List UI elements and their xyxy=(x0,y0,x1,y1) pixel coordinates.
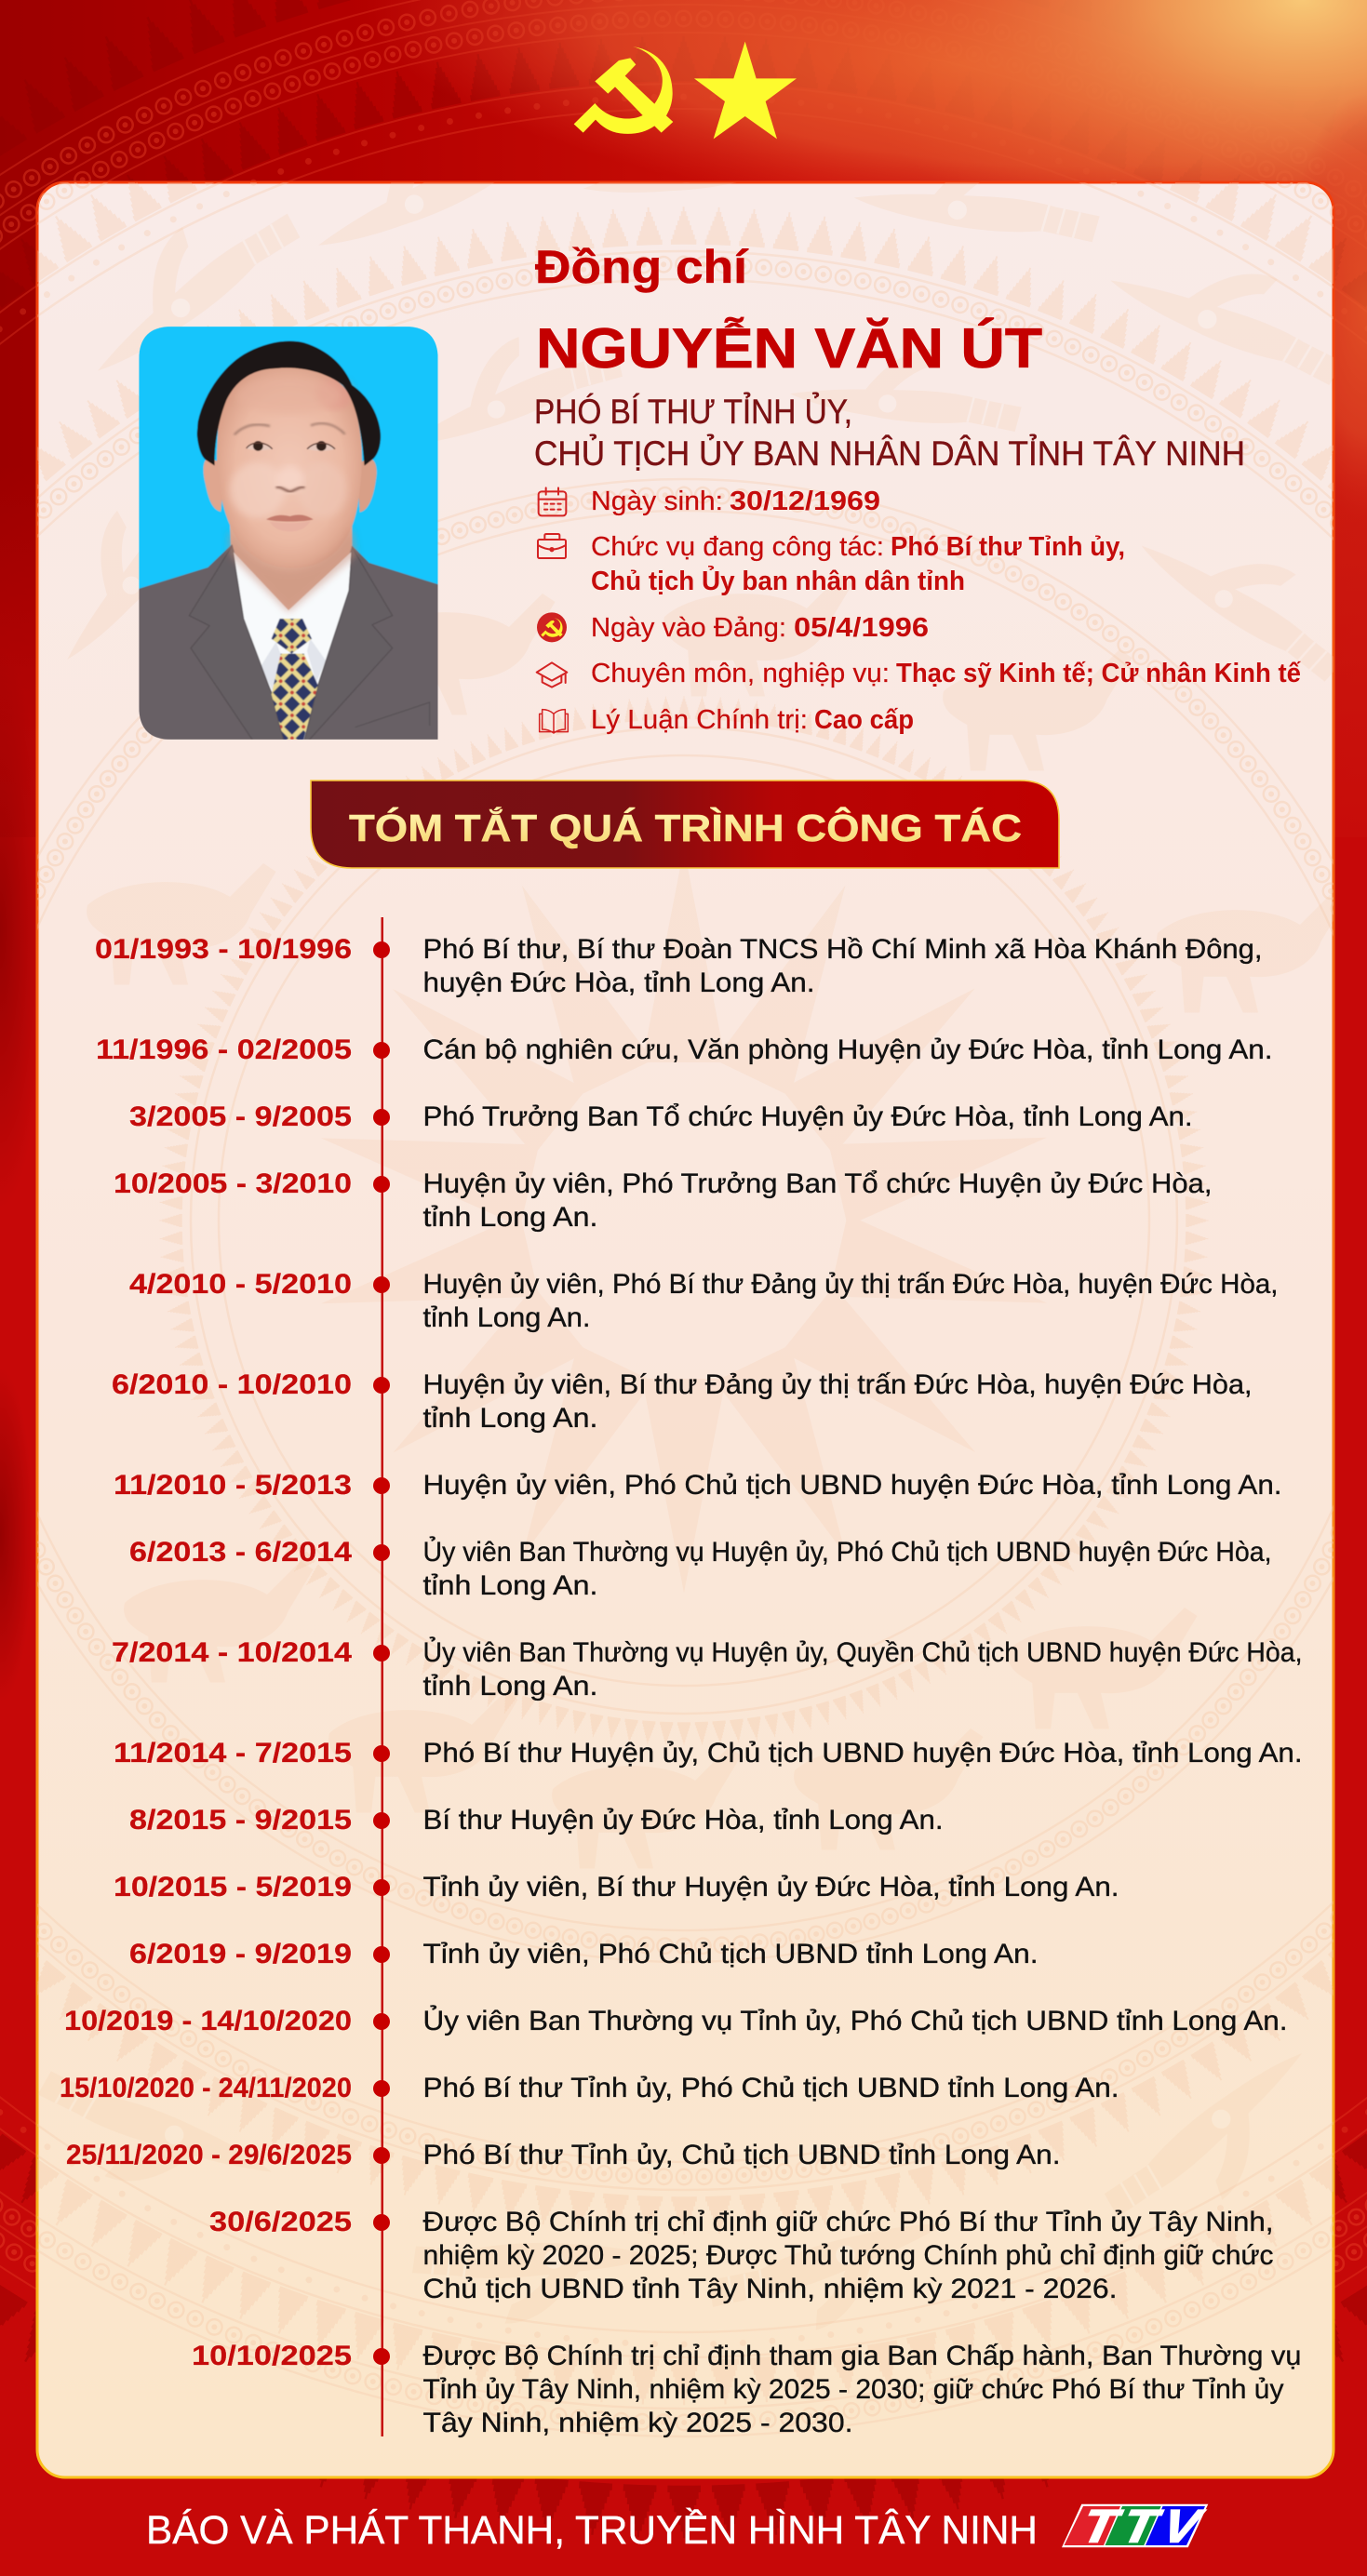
icon: calendar xyxy=(539,487,566,515)
party join date xyxy=(591,613,929,643)
row 9 xyxy=(112,1636,1303,1702)
row 4 xyxy=(114,1168,1212,1233)
row 4: 10/2005 - 3/2010 xyxy=(114,1168,352,1199)
name block xyxy=(534,241,1245,473)
hair xyxy=(197,341,381,466)
row 4: Huyện ủy viên, Phó Trưởng Ban Tổ chức Huyện ủy Đức Hòa, xyxy=(422,1168,1212,1199)
row 6: 6/2010 - 10/2010 xyxy=(112,1369,352,1400)
political theory: Cao cấp xyxy=(814,705,914,735)
row 1 xyxy=(95,934,1262,998)
row 16: Phó Bí thư Tỉnh ủy, Chủ tịch UBND tỉnh Long An. xyxy=(422,2140,1061,2170)
row 13 xyxy=(129,1939,1039,1969)
section banner heading: TÓM TẮT QUÁ TRÌNH CÔNG TÁC xyxy=(349,807,1022,849)
jacket xyxy=(133,544,444,747)
row 13: Tỉnh ủy viên, Phó Chủ tịch UBND tỉnh Long An. xyxy=(422,1939,1039,1969)
row 2 xyxy=(96,1034,1273,1065)
timeline xyxy=(60,917,1303,2438)
expertise: Chuyên môn, nghiệp vụ: xyxy=(591,659,890,688)
row 3 xyxy=(129,1101,1193,1132)
row 7: Huyện ủy viên, Phó Chủ tịch UBND huyện Đức Hòa, tỉnh Long An. xyxy=(422,1470,1282,1501)
TTV logo: T xyxy=(1112,2502,1169,2553)
row 14: Ủy viên Ban Thường vụ Tỉnh ủy, Phó Chủ tịch UBND tỉnh Long An. xyxy=(422,2005,1288,2036)
TTV logo: V xyxy=(1152,2502,1211,2553)
row 11: Bí thư Huyện ủy Đức Hòa, tỉnh Long An. xyxy=(422,1805,944,1835)
row 9: Ủy viên Ban Thường vụ Huyện ủy, Quyền Chủ tịch UBND huyện Đức Hòa, xyxy=(422,1636,1303,1668)
party join date: Ngày vào Đảng: xyxy=(591,613,786,643)
row 18 xyxy=(192,2341,1301,2438)
emblem: hammer and sickle xyxy=(574,47,673,134)
row 5: tỉnh Long An. xyxy=(422,1302,590,1333)
row 8: Ủy viên Ban Thường vụ Huyện ủy, Phó Chủ tịch UBND huyện Đức Hòa, xyxy=(422,1536,1271,1568)
salutation: Đồng chí xyxy=(535,241,749,293)
emblem: yellow star xyxy=(694,42,797,139)
tie xyxy=(272,619,312,654)
row 8 xyxy=(129,1536,1271,1601)
info list xyxy=(537,487,1301,735)
position line 1: PHÓ BÍ THƯ TỈNH ỦY, xyxy=(534,392,852,431)
birth date: Ngày sinh: xyxy=(591,487,723,516)
birth date: 30/12/1969 xyxy=(730,487,880,516)
icon: graduation cap xyxy=(537,662,567,687)
row 17: Chủ tịch UBND tỉnh Tây Ninh, nhiệm kỳ 2021 - 2026. xyxy=(422,2274,1117,2304)
shirt xyxy=(232,551,351,740)
row 1: huyện Đức Hòa, tỉnh Long An. xyxy=(422,968,815,998)
political theory: Lý Luận Chính trị: xyxy=(591,705,808,735)
face xyxy=(217,367,362,568)
row 12: 10/2015 - 5/2019 xyxy=(114,1872,352,1902)
ears xyxy=(204,458,225,512)
row 18: 10/10/2025 xyxy=(192,2341,352,2371)
row 5: 4/2010 - 5/2010 xyxy=(129,1269,352,1300)
party join date: 05/4/1996 xyxy=(794,613,929,643)
row 2: Cán bộ nghiên cứu, Văn phòng Huyện ủy Đức Hòa, tỉnh Long An. xyxy=(422,1034,1273,1065)
row 12: Tỉnh ủy viên, Bí thư Huyện ủy Đức Hòa, tỉnh Long An. xyxy=(422,1872,1119,1902)
name: NGUYỄN VĂN ÚT xyxy=(536,317,1042,380)
TTV logo: T xyxy=(1072,2502,1129,2553)
row 6: Huyện ủy viên, Bí thư Đảng ủy thị trấn Đức Hòa, huyện Đức Hòa, xyxy=(422,1369,1253,1400)
row 1: 01/1993 - 10/1996 xyxy=(95,934,352,965)
facial features xyxy=(228,377,356,612)
row 1: Phó Bí thư, Bí thư Đoàn TNCS Hồ Chí Minh xã Hòa Khánh Đông, xyxy=(422,934,1262,965)
row 11 xyxy=(129,1805,944,1835)
icon: open book xyxy=(540,710,568,733)
row 4: tỉnh Long An. xyxy=(422,1202,597,1233)
row 5: Huyện ủy viên, Phó Bí thư Đảng ủy thị trấn Đức Hòa, huyện Đức Hòa, xyxy=(422,1269,1279,1300)
birth date xyxy=(591,487,880,516)
row 17: nhiệm kỳ 2020 - 2025; Được Thủ tướng Chính phủ chỉ định giữ chức xyxy=(422,2240,1273,2271)
political theory xyxy=(591,705,914,735)
timeline axis xyxy=(382,917,383,2436)
row 2: 11/1996 - 02/2005 xyxy=(96,1034,352,1065)
row 15: Phó Bí thư Tỉnh ủy, Phó Chủ tịch UBND tỉnh Long An. xyxy=(422,2073,1119,2103)
row 10: 11/2014 - 7/2015 xyxy=(114,1738,352,1768)
row 17: 30/6/2025 xyxy=(209,2207,352,2237)
row 16: 25/11/2020 - 29/6/2025 xyxy=(66,2140,352,2170)
row 16 xyxy=(66,2140,1061,2170)
row 14 xyxy=(64,2005,1288,2036)
row 7 xyxy=(114,1470,1282,1501)
row 6 xyxy=(112,1369,1253,1434)
current position: Chủ tịch Ủy ban nhân dân tỉnh xyxy=(591,566,965,596)
row 14: 10/2019 - 14/10/2020 xyxy=(64,2006,352,2036)
position line 2: CHỦ TỊCH ỦY BAN NHÂN DÂN TỈNH TÂY NINH xyxy=(534,434,1245,473)
section banner heading xyxy=(311,781,1059,868)
row 10 xyxy=(114,1738,1303,1768)
row 13: 6/2019 - 9/2019 xyxy=(129,1939,352,1969)
icon: briefcase xyxy=(538,534,566,558)
row 18: Tỉnh ủy Tây Ninh, nhiệm kỳ 2025 - 2030; giữ chức Phó Bí thư Tỉnh ủy xyxy=(422,2374,1284,2405)
row 12 xyxy=(114,1872,1119,1902)
row 5 xyxy=(129,1269,1279,1333)
row 3: 3/2005 - 9/2005 xyxy=(129,1101,352,1132)
row 10: Phó Bí thư Huyện ủy, Chủ tịch UBND huyện Đức Hòa, tỉnh Long An. xyxy=(422,1738,1303,1768)
row 6: tỉnh Long An. xyxy=(422,1403,597,1434)
row 18: Được Bộ Chính trị chỉ định tham gia Ban Chấp hành, Ban Thường vụ xyxy=(422,2341,1301,2371)
row 11: 8/2015 - 9/2015 xyxy=(129,1805,352,1835)
row 8: 6/2013 - 6/2014 xyxy=(129,1537,353,1568)
current position: Chức vụ đang công tác: xyxy=(591,532,884,562)
row 15 xyxy=(60,2073,1119,2103)
footer organisation name: BÁO VÀ PHÁT THANH, TRUYỀN HÌNH TÂY NINH xyxy=(146,2508,1038,2553)
row 18: Tây Ninh, nhiệm kỳ 2025 - 2030. xyxy=(422,2408,852,2438)
row 17 xyxy=(209,2207,1273,2304)
row 17: Được Bộ Chính trị chỉ định giữ chức Phó Bí thư Tỉnh ủy Tây Ninh, xyxy=(422,2207,1273,2237)
pocket xyxy=(355,702,430,727)
row 8: tỉnh Long An. xyxy=(422,1570,597,1601)
row 3: Phó Trưởng Ban Tổ chức Huyện ủy Đức Hòa, tỉnh Long An. xyxy=(422,1101,1193,1132)
lapels xyxy=(189,546,286,747)
row 15: 15/10/2020 - 24/11/2020 xyxy=(60,2073,352,2103)
portrait photo xyxy=(133,323,444,747)
current position: Phó Bí thư Tỉnh ủy, xyxy=(891,532,1125,562)
expertise xyxy=(591,659,1301,688)
icon: party emblem xyxy=(537,612,567,642)
row 9: 7/2014 - 10/2014 xyxy=(112,1637,353,1668)
neck xyxy=(229,525,354,610)
expertise: Thạc sỹ Kinh tế; Cử nhân Kinh tế xyxy=(896,659,1301,688)
TTV logo xyxy=(1062,2502,1211,2553)
row 9: tỉnh Long An. xyxy=(422,1671,597,1702)
current position xyxy=(591,532,1125,596)
row 7: 11/2010 - 5/2013 xyxy=(114,1470,352,1501)
